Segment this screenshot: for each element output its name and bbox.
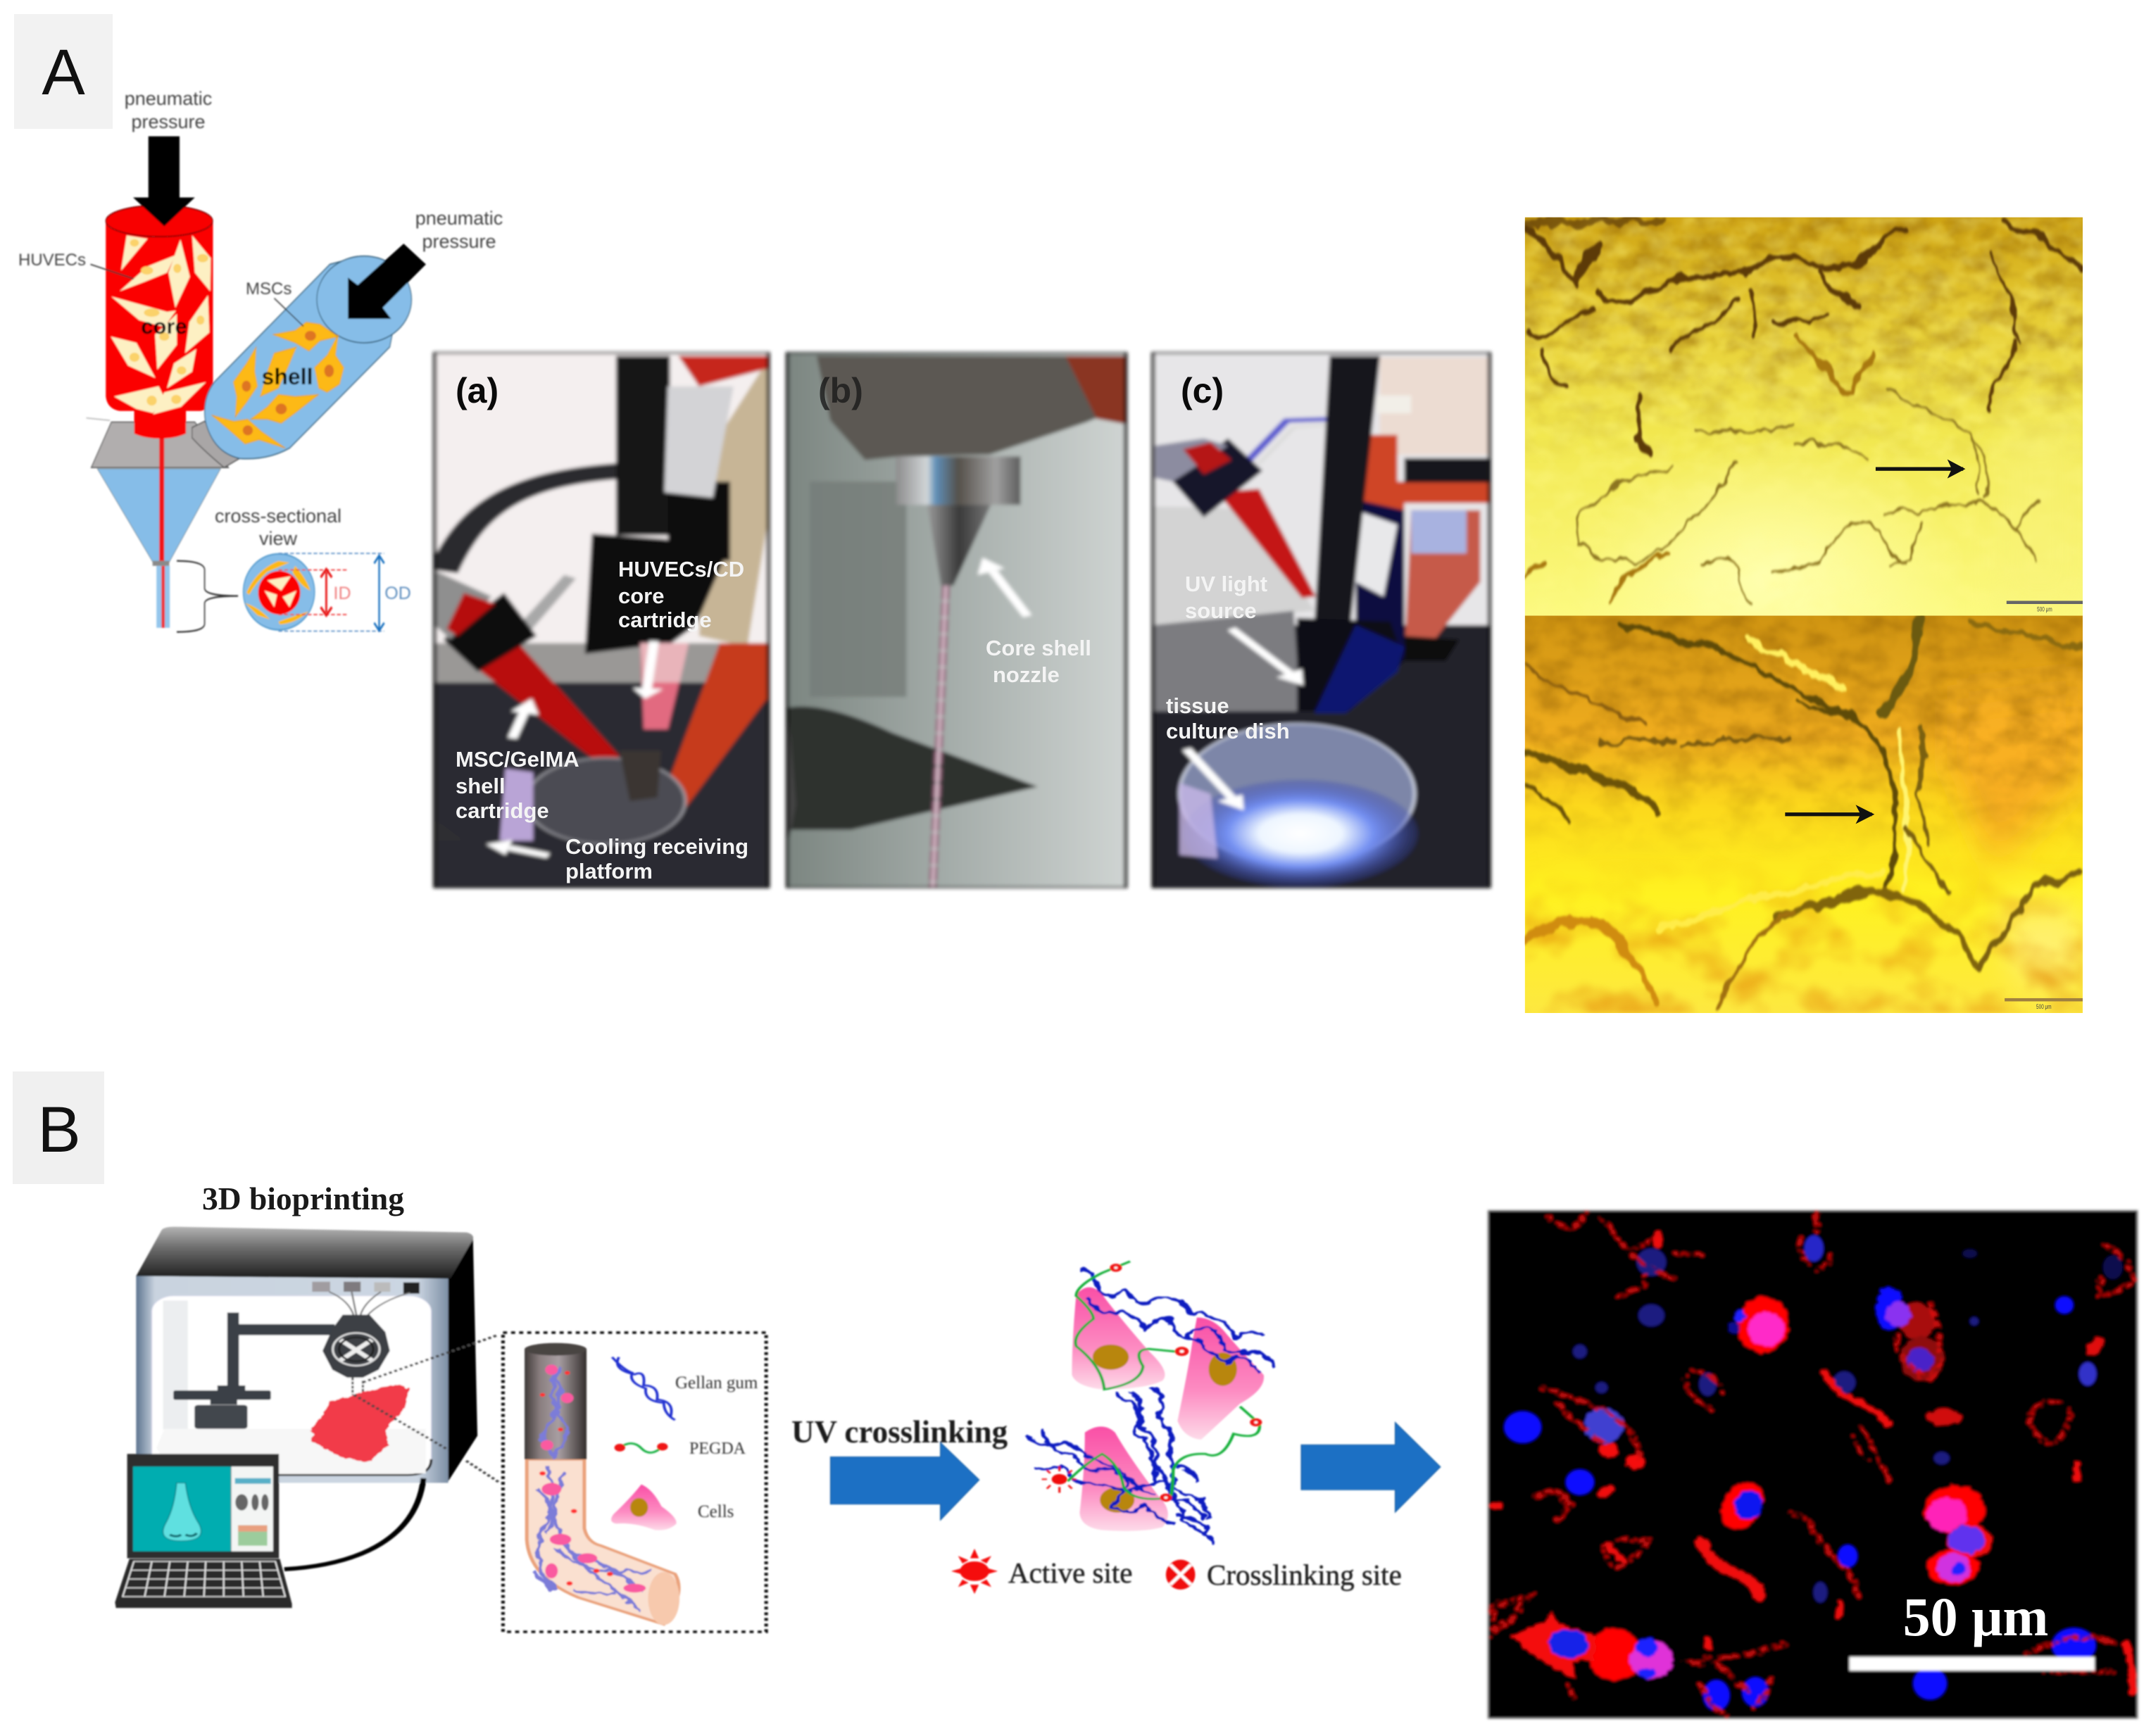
heading: 3D bioprinting: 3D bioprinting (202, 1181, 404, 1216)
laptop with nose model (115, 1454, 292, 1608)
arrow to stained result (1301, 1422, 1441, 1512)
printer cabinet (136, 1227, 477, 1483)
legend text: Gellan gum (675, 1373, 758, 1392)
scale bar (2005, 998, 2083, 1010)
panel B label (13, 1071, 104, 1184)
leader lines (87, 264, 303, 420)
dotted inset box (503, 1333, 766, 1632)
schematic labels: view (259, 528, 298, 549)
photo (a): printer with cartridges: HUVECs/CD (618, 557, 744, 581)
upper micrograph (1525, 217, 2083, 615)
cable (284, 1478, 424, 1569)
arrow (1785, 805, 1874, 824)
photo (c): UV light crosslinking (1153, 353, 1489, 887)
legend text: Cells (698, 1502, 734, 1521)
legend icon: cell (611, 1485, 677, 1530)
lower micrograph (1525, 616, 2083, 1013)
schematic labels (18, 88, 503, 603)
pressure arrow: core (133, 137, 195, 227)
photo (a): printer with cartridges: MSC/GelMA (456, 747, 579, 772)
UV crosslinking heading: UV crosslinking (791, 1414, 1008, 1449)
legend text: PEGDA (689, 1440, 746, 1458)
speckled cell outlines (1493, 1212, 2135, 1716)
thick red fibres (1493, 1235, 2133, 1692)
photo (c): UV light crosslinking: UV light (1185, 572, 1267, 596)
legend icon: crosslinking site (1166, 1560, 1196, 1590)
schematic labels: cross-sectional (215, 505, 341, 527)
photo (c): UV light crosslinking: culture dish (1166, 719, 1290, 743)
section bracket (177, 561, 238, 632)
cross-section circle (244, 554, 315, 630)
schematic labels: shell (262, 364, 313, 389)
photo (b): core shell nozzle: Core shell (986, 636, 1091, 660)
nuclei (1505, 1235, 2096, 1711)
core cartridge (106, 206, 213, 439)
photo (a): printer with cartridges: shell (456, 774, 506, 798)
schematic labels: pneumatic (415, 208, 503, 229)
panel A label: A (42, 37, 85, 108)
legend: crosslinking site: Crosslinking site (1207, 1559, 1402, 1591)
schematic labels: pressure (131, 111, 206, 132)
print head (322, 1315, 390, 1395)
photo (c): UV light crosslinking: tissue (1166, 693, 1229, 718)
scale label: 50 μm (1903, 1586, 2048, 1647)
extruded fibre (153, 438, 170, 628)
panel: vessel micrographs (1525, 218, 2083, 1013)
scale bar (2007, 600, 2083, 613)
photo (a): printer with cartridges: cartridge (618, 608, 712, 632)
dim nuclei (1573, 1248, 2122, 1602)
photo (a): printer with cartridges: Cooling receiving (565, 834, 748, 859)
schematic labels: MSCs (246, 279, 291, 298)
legend icon: active site (951, 1549, 998, 1594)
legend text (675, 1373, 758, 1521)
solid stained cells (1512, 1287, 2107, 1680)
cell network (1027, 1262, 1274, 1545)
scale bar: 500 μm (2036, 1003, 2052, 1010)
photo (b): core shell nozzle: nozzle (993, 662, 1060, 687)
ID and OD dimension lines (278, 553, 384, 631)
arrow (1876, 460, 1965, 479)
photo (b): core shell nozzle: (b) (818, 371, 863, 410)
photo (c): UV light crosslinking: (c) (1181, 371, 1224, 410)
legend icon: PEGDA (615, 1443, 668, 1452)
photo (a): printer with cartridges: platform (565, 859, 653, 883)
printed red tissue (311, 1384, 408, 1461)
photo (a): printer with cartridges: cartridge (456, 798, 549, 823)
schematic labels: HUVECs (18, 251, 86, 270)
legend: active site: Active site (1008, 1556, 1132, 1589)
legend icon: gellan gum (612, 1357, 675, 1420)
panel B label: B (37, 1094, 81, 1166)
photo (a): printer with cartridges (435, 353, 768, 887)
bioprinter illustration (115, 1227, 766, 1632)
shell cartridge (205, 256, 411, 459)
scale bar (1850, 1657, 2095, 1671)
printed filament cutaway (525, 1343, 679, 1625)
schematic labels: core (141, 314, 187, 339)
dotted zoom lines (354, 1335, 500, 1483)
photo (a): printer with cartridges: (a) (456, 371, 498, 410)
scale bar: 500 μm (2037, 605, 2052, 613)
photo (c): UV light crosslinking: source (1185, 598, 1257, 623)
blue cone nozzle (97, 469, 220, 562)
pressure arrow: shell (348, 244, 426, 319)
schematic labels: OD (384, 584, 411, 603)
panel: core-shell printing schematic (18, 88, 503, 632)
schematic labels: ID (334, 584, 351, 603)
panel A label (14, 14, 113, 129)
panel: fluorescence micrograph (1488, 1211, 2138, 1718)
gray nozzle collar (92, 421, 239, 467)
panel: printer photos a, b, c (435, 353, 1489, 887)
printer arm and camera (173, 1312, 334, 1429)
schematic labels: pneumatic (125, 88, 212, 109)
photo (a): printer with cartridges: core (618, 584, 664, 608)
crosslinking stage (791, 1262, 1441, 1594)
photo (b): core shell nozzle (787, 353, 1126, 887)
schematic labels: pressure (422, 231, 496, 252)
arrow: UV crosslinking (831, 1442, 979, 1520)
